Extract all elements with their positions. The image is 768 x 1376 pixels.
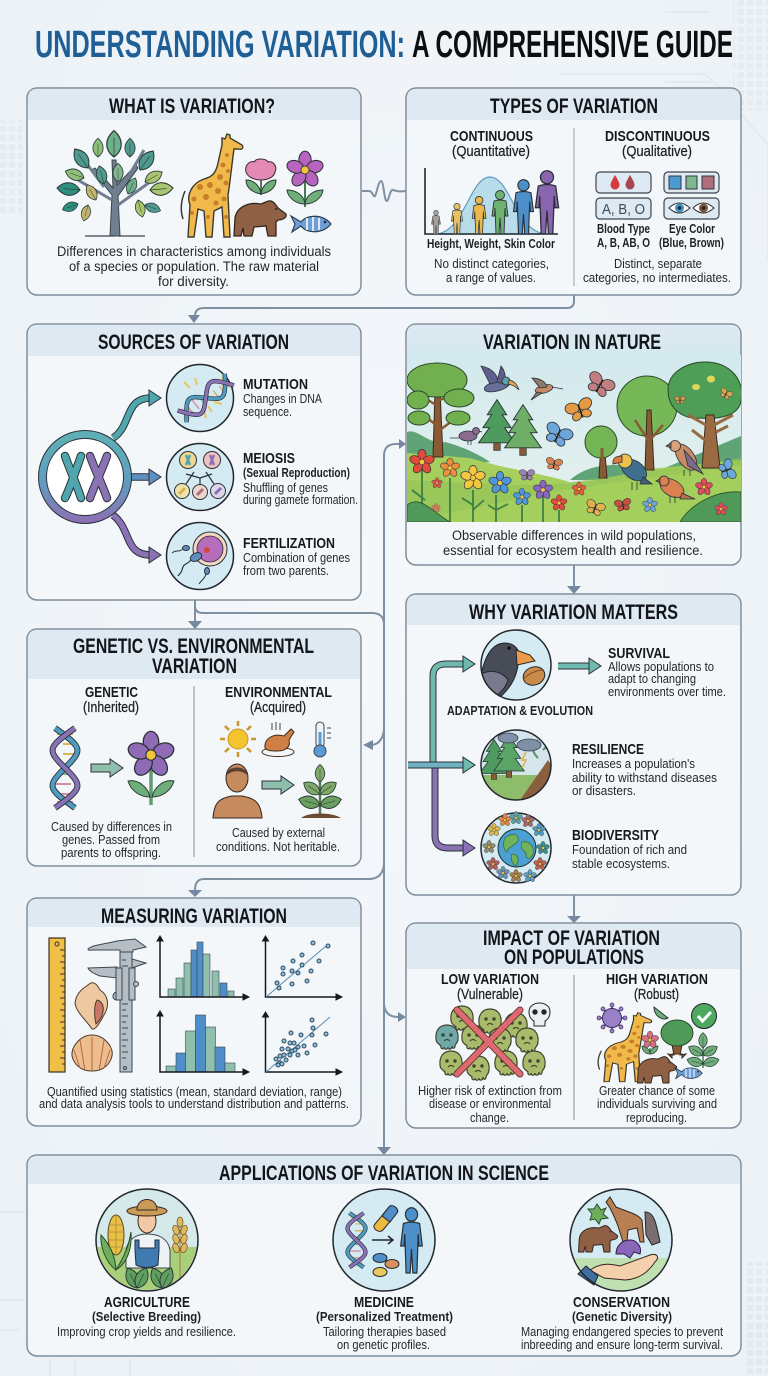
low variation labels bbox=[441, 971, 539, 1003]
discontinuous text: Eye Color bbox=[669, 221, 715, 236]
description bbox=[39, 1084, 349, 1111]
bell curve chart with people bbox=[425, 168, 559, 234]
icon: fish bbox=[675, 1068, 702, 1079]
icon: tree bbox=[56, 131, 174, 236]
icon: ruler bbox=[49, 938, 65, 1072]
low variation text: change. bbox=[470, 1110, 509, 1125]
icon: finch and nut bbox=[478, 630, 551, 705]
icon: agriculture farmer bbox=[96, 1189, 198, 1292]
chromosome diagram with arrows bbox=[38, 390, 161, 563]
heading: MEASURING VARIATION bbox=[101, 905, 287, 928]
discontinuous labels: (Qualitative) bbox=[622, 144, 692, 160]
continuous labels bbox=[450, 128, 533, 160]
icon: globe with species ring bbox=[481, 811, 551, 883]
agriculture text: AGRICULTURE bbox=[104, 1294, 190, 1311]
genetic text: genes. Passed from bbox=[62, 832, 160, 847]
survival text: Allows populations to bbox=[608, 659, 714, 674]
heading: GENETIC VS. ENVIRONMENTAL bbox=[73, 635, 314, 658]
description: and data analysis tools to understand distribution and patterns. bbox=[39, 1096, 349, 1111]
environmental column labels: ENVIRONMENTAL bbox=[225, 684, 332, 701]
mutation text: MUTATION bbox=[243, 376, 308, 393]
environmental column labels bbox=[225, 684, 332, 716]
genetic text bbox=[51, 819, 172, 860]
agriculture text: (Selective Breeding) bbox=[92, 1309, 201, 1324]
medicine text: Tailoring therapies based bbox=[323, 1324, 446, 1339]
icon: dna bbox=[53, 728, 77, 808]
description: Differences in characteristics among individuals bbox=[57, 244, 331, 259]
biodiversity text: stable ecosystems. bbox=[572, 856, 670, 871]
icon: bear bbox=[234, 201, 286, 236]
meiosis text: (Sexual Reproduction) bbox=[243, 465, 350, 480]
continuous labels: (Quantitative) bbox=[452, 144, 530, 160]
continuous text: Height, Weight, Skin Color bbox=[427, 236, 555, 251]
birds bbox=[450, 366, 703, 503]
resilience text: Increases a population's bbox=[572, 756, 695, 771]
agriculture text bbox=[57, 1294, 236, 1339]
fertilization text: FERTILIZATION bbox=[243, 535, 335, 552]
icon: thermometer bbox=[314, 722, 331, 757]
conservation text bbox=[521, 1294, 723, 1352]
meiosis text: Shuffling of genes bbox=[243, 480, 328, 495]
nature scene illustration bbox=[407, 355, 742, 522]
icon: giraffe bbox=[598, 1013, 652, 1082]
high variation labels: (Robust) bbox=[634, 987, 679, 1003]
icon grid: blood type and eye color bbox=[596, 172, 719, 219]
icon: shells bbox=[72, 983, 112, 1071]
continuous labels: CONTINUOUS bbox=[450, 128, 533, 145]
environmental column labels: (Acquired) bbox=[250, 700, 306, 716]
discontinuous text: categories, no intermediates. bbox=[583, 270, 731, 285]
icon: virus bbox=[597, 1003, 627, 1033]
high variation text: Greater chance of some bbox=[599, 1083, 715, 1098]
heading: VARIATION bbox=[152, 655, 237, 678]
meiosis text: MEIOSIS bbox=[243, 450, 295, 467]
survival text: SURVIVAL bbox=[608, 645, 670, 662]
biodiversity text: Foundation of rich and bbox=[572, 842, 687, 857]
genetic text: Caused by differences in bbox=[51, 819, 172, 834]
environmental text: Caused by external bbox=[232, 825, 325, 840]
icon: storm and forest bbox=[480, 730, 555, 800]
icon: fish bbox=[291, 216, 331, 232]
continuous text: a range of values. bbox=[446, 270, 536, 285]
panel: why variation matters bbox=[406, 594, 741, 895]
heading: IMPACT OF VARIATION bbox=[483, 927, 660, 950]
genetic column labels: GENETIC bbox=[85, 684, 138, 701]
icon: person bbox=[213, 764, 262, 818]
survival text: adapt to changing bbox=[608, 671, 696, 686]
discontinuous text: Distinct, separate bbox=[614, 256, 702, 271]
connectors bbox=[188, 181, 581, 1155]
panel: sources of variation bbox=[27, 324, 361, 600]
heading bbox=[483, 927, 660, 969]
biodiversity text bbox=[572, 827, 687, 871]
icon: check badge bbox=[692, 1004, 716, 1028]
heading: ON POPULATIONS bbox=[504, 946, 644, 969]
heading: APPLICATIONS OF VARIATION IN SCIENCE bbox=[219, 1162, 549, 1185]
panel: measuring variation bbox=[27, 898, 361, 1126]
conservation text: inbreeding and ensure long-term survival. bbox=[521, 1337, 723, 1352]
medicine text: MEDICINE bbox=[354, 1294, 414, 1311]
resilience text bbox=[572, 741, 717, 798]
scatter plot bottom bbox=[262, 1012, 342, 1075]
heading: TYPES OF VARIATION bbox=[490, 95, 658, 118]
high variation labels: HIGH VARIATION bbox=[606, 971, 708, 988]
arrow bbox=[262, 776, 294, 794]
icon: purple flower bbox=[285, 151, 325, 207]
description: Quantified using statistics (mean, standard deviation, range) bbox=[47, 1084, 342, 1099]
low variation text bbox=[418, 1083, 562, 1125]
caption: essential for ecosystem health and resilience. bbox=[443, 543, 703, 558]
icon: roast chicken bbox=[262, 722, 294, 756]
icon: tree bbox=[661, 1020, 693, 1058]
conservation text: CONSERVATION bbox=[573, 1294, 670, 1311]
icon: bear bbox=[638, 1057, 677, 1083]
high variation labels bbox=[606, 971, 708, 1003]
genetic column labels: (Inherited) bbox=[83, 700, 139, 716]
panel: genetic vs environmental bbox=[27, 629, 361, 866]
heading: WHY VARIATION MATTERS bbox=[469, 601, 678, 624]
caption bbox=[443, 528, 703, 558]
histogram bottom bbox=[157, 1011, 249, 1075]
icon: conservation bbox=[570, 1189, 672, 1298]
icon: giraffe bbox=[181, 134, 243, 237]
icon: pink flower bbox=[246, 159, 276, 195]
panel: types of variation bbox=[406, 88, 741, 295]
icon: fertilization bbox=[166, 522, 234, 590]
caption: Observable differences in wild populations, bbox=[452, 528, 696, 543]
discontinuous text: A, B, AB, O bbox=[597, 235, 650, 250]
heading: VARIATION IN NATURE bbox=[483, 331, 661, 354]
branching arrows bbox=[408, 656, 601, 856]
heading: SOURCES OF VARIATION bbox=[98, 331, 289, 354]
high variation text bbox=[597, 1083, 717, 1125]
discontinuous labels: DISCONTINUOUS bbox=[605, 128, 710, 145]
description: for diversity. bbox=[158, 274, 229, 289]
genetic column labels bbox=[83, 684, 139, 716]
medicine text: on genetic profiles. bbox=[337, 1337, 430, 1352]
heading: WHAT IS VARIATION? bbox=[109, 95, 275, 118]
fertilization text: from two parents. bbox=[243, 563, 329, 578]
conservation text: (Genetic Diversity) bbox=[572, 1309, 672, 1324]
histogram top bbox=[157, 936, 249, 1000]
panel: what is variation bbox=[27, 88, 361, 295]
continuous text: No distinct categories, bbox=[434, 256, 549, 271]
panel: impact on populations bbox=[406, 923, 741, 1128]
discontinuous text bbox=[583, 221, 731, 285]
environmental text: conditions. Not heritable. bbox=[216, 839, 340, 854]
scatter plot top bbox=[262, 936, 342, 1000]
icon: skull bbox=[529, 1003, 550, 1026]
survival text bbox=[608, 645, 726, 699]
icon grid: blood type and eye color: A, B, O bbox=[602, 201, 645, 218]
arrow bbox=[91, 759, 123, 777]
butterflies bbox=[588, 371, 616, 397]
title: UNDERSTANDING VARIATION: bbox=[35, 24, 405, 66]
low variation text: disease or environmental bbox=[429, 1096, 551, 1111]
discontinuous text: (Blue, Brown) bbox=[659, 235, 724, 250]
panel: applications in science bbox=[27, 1155, 741, 1356]
genetic text: parents to offspring. bbox=[61, 845, 161, 860]
icon: flower bbox=[641, 1031, 659, 1054]
icon: sun bbox=[220, 721, 256, 757]
wildflowers bbox=[412, 465, 559, 522]
discontinuous labels bbox=[605, 128, 710, 160]
high variation text: individuals surviving and bbox=[597, 1096, 717, 1111]
icon: purple flower bbox=[126, 731, 176, 805]
description: of a species or population. The raw material bbox=[69, 259, 319, 274]
heading bbox=[73, 635, 314, 678]
meiosis text: during gamete formation. bbox=[243, 492, 358, 507]
agriculture text: Improving crop yields and resilience. bbox=[57, 1324, 236, 1339]
high variation text: reproducing. bbox=[626, 1110, 687, 1125]
mutation text bbox=[243, 376, 322, 419]
resilience text: or disasters. bbox=[572, 783, 636, 798]
low variation text: Higher risk of extinction from bbox=[418, 1083, 562, 1098]
resilience text: RESILIENCE bbox=[572, 741, 644, 758]
mutation text: sequence. bbox=[243, 404, 292, 419]
biodiversity text: BIODIVERSITY bbox=[572, 827, 659, 844]
description bbox=[57, 244, 331, 289]
discontinuous text: Blood Type bbox=[597, 221, 650, 236]
icon: germs crossed out bbox=[436, 1006, 545, 1080]
fertilization text bbox=[243, 535, 350, 578]
low variation labels: (Vulnerable) bbox=[457, 987, 523, 1003]
survival text: environments over time. bbox=[608, 684, 726, 699]
low variation labels: LOW VARIATION bbox=[441, 971, 539, 988]
mutation text: Changes in DNA bbox=[243, 391, 322, 406]
medicine text: (Personalized Treatment) bbox=[316, 1309, 453, 1324]
icon: medicine bbox=[333, 1189, 435, 1291]
icon: meiosis cells bbox=[166, 444, 234, 510]
environmental text bbox=[216, 825, 340, 854]
conservation text: Managing endangered species to prevent bbox=[521, 1324, 723, 1339]
continuous text bbox=[427, 236, 555, 285]
icon: plant bbox=[297, 764, 343, 818]
icon: small leaf bbox=[654, 1007, 668, 1019]
adaptation label: ADAPTATION & EVOLUTION bbox=[447, 703, 593, 718]
resilience text: ability to withstand diseases bbox=[572, 770, 717, 785]
icon: leafy sprig bbox=[686, 1033, 720, 1068]
icon: mutation dna bbox=[166, 364, 235, 432]
medicine text bbox=[316, 1294, 453, 1352]
fertilization text: Combination of genes bbox=[243, 550, 350, 565]
panel: variation in nature bbox=[406, 324, 742, 565]
icon: caliper bbox=[88, 939, 146, 1072]
meiosis text bbox=[243, 450, 358, 507]
